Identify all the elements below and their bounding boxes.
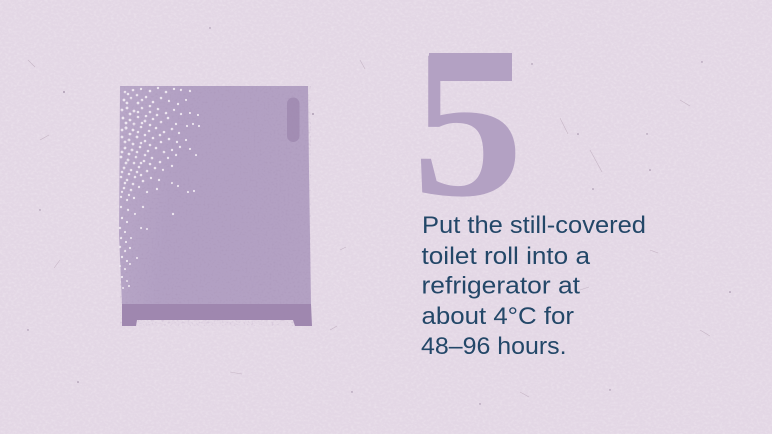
- instruction text: Put the still-covered: [422, 212, 646, 239]
- instruction text: toilet roll into a: [422, 243, 591, 270]
- instruction text: about 4°C for: [422, 303, 574, 330]
- fridge grain texture: [120, 86, 311, 326]
- frost speckles: [119, 87, 200, 289]
- fridge door handle: [287, 98, 300, 142]
- instruction text: 48–96 hours.: [421, 333, 566, 360]
- instruction text: refrigerator at: [422, 272, 580, 300]
- fridge base band and feet: [122, 304, 312, 326]
- instruction text: [421, 212, 646, 360]
- refrigerator illustration: [119, 86, 312, 326]
- step number 5: 5: [412, 6, 523, 241]
- fridge body: [119, 86, 311, 304]
